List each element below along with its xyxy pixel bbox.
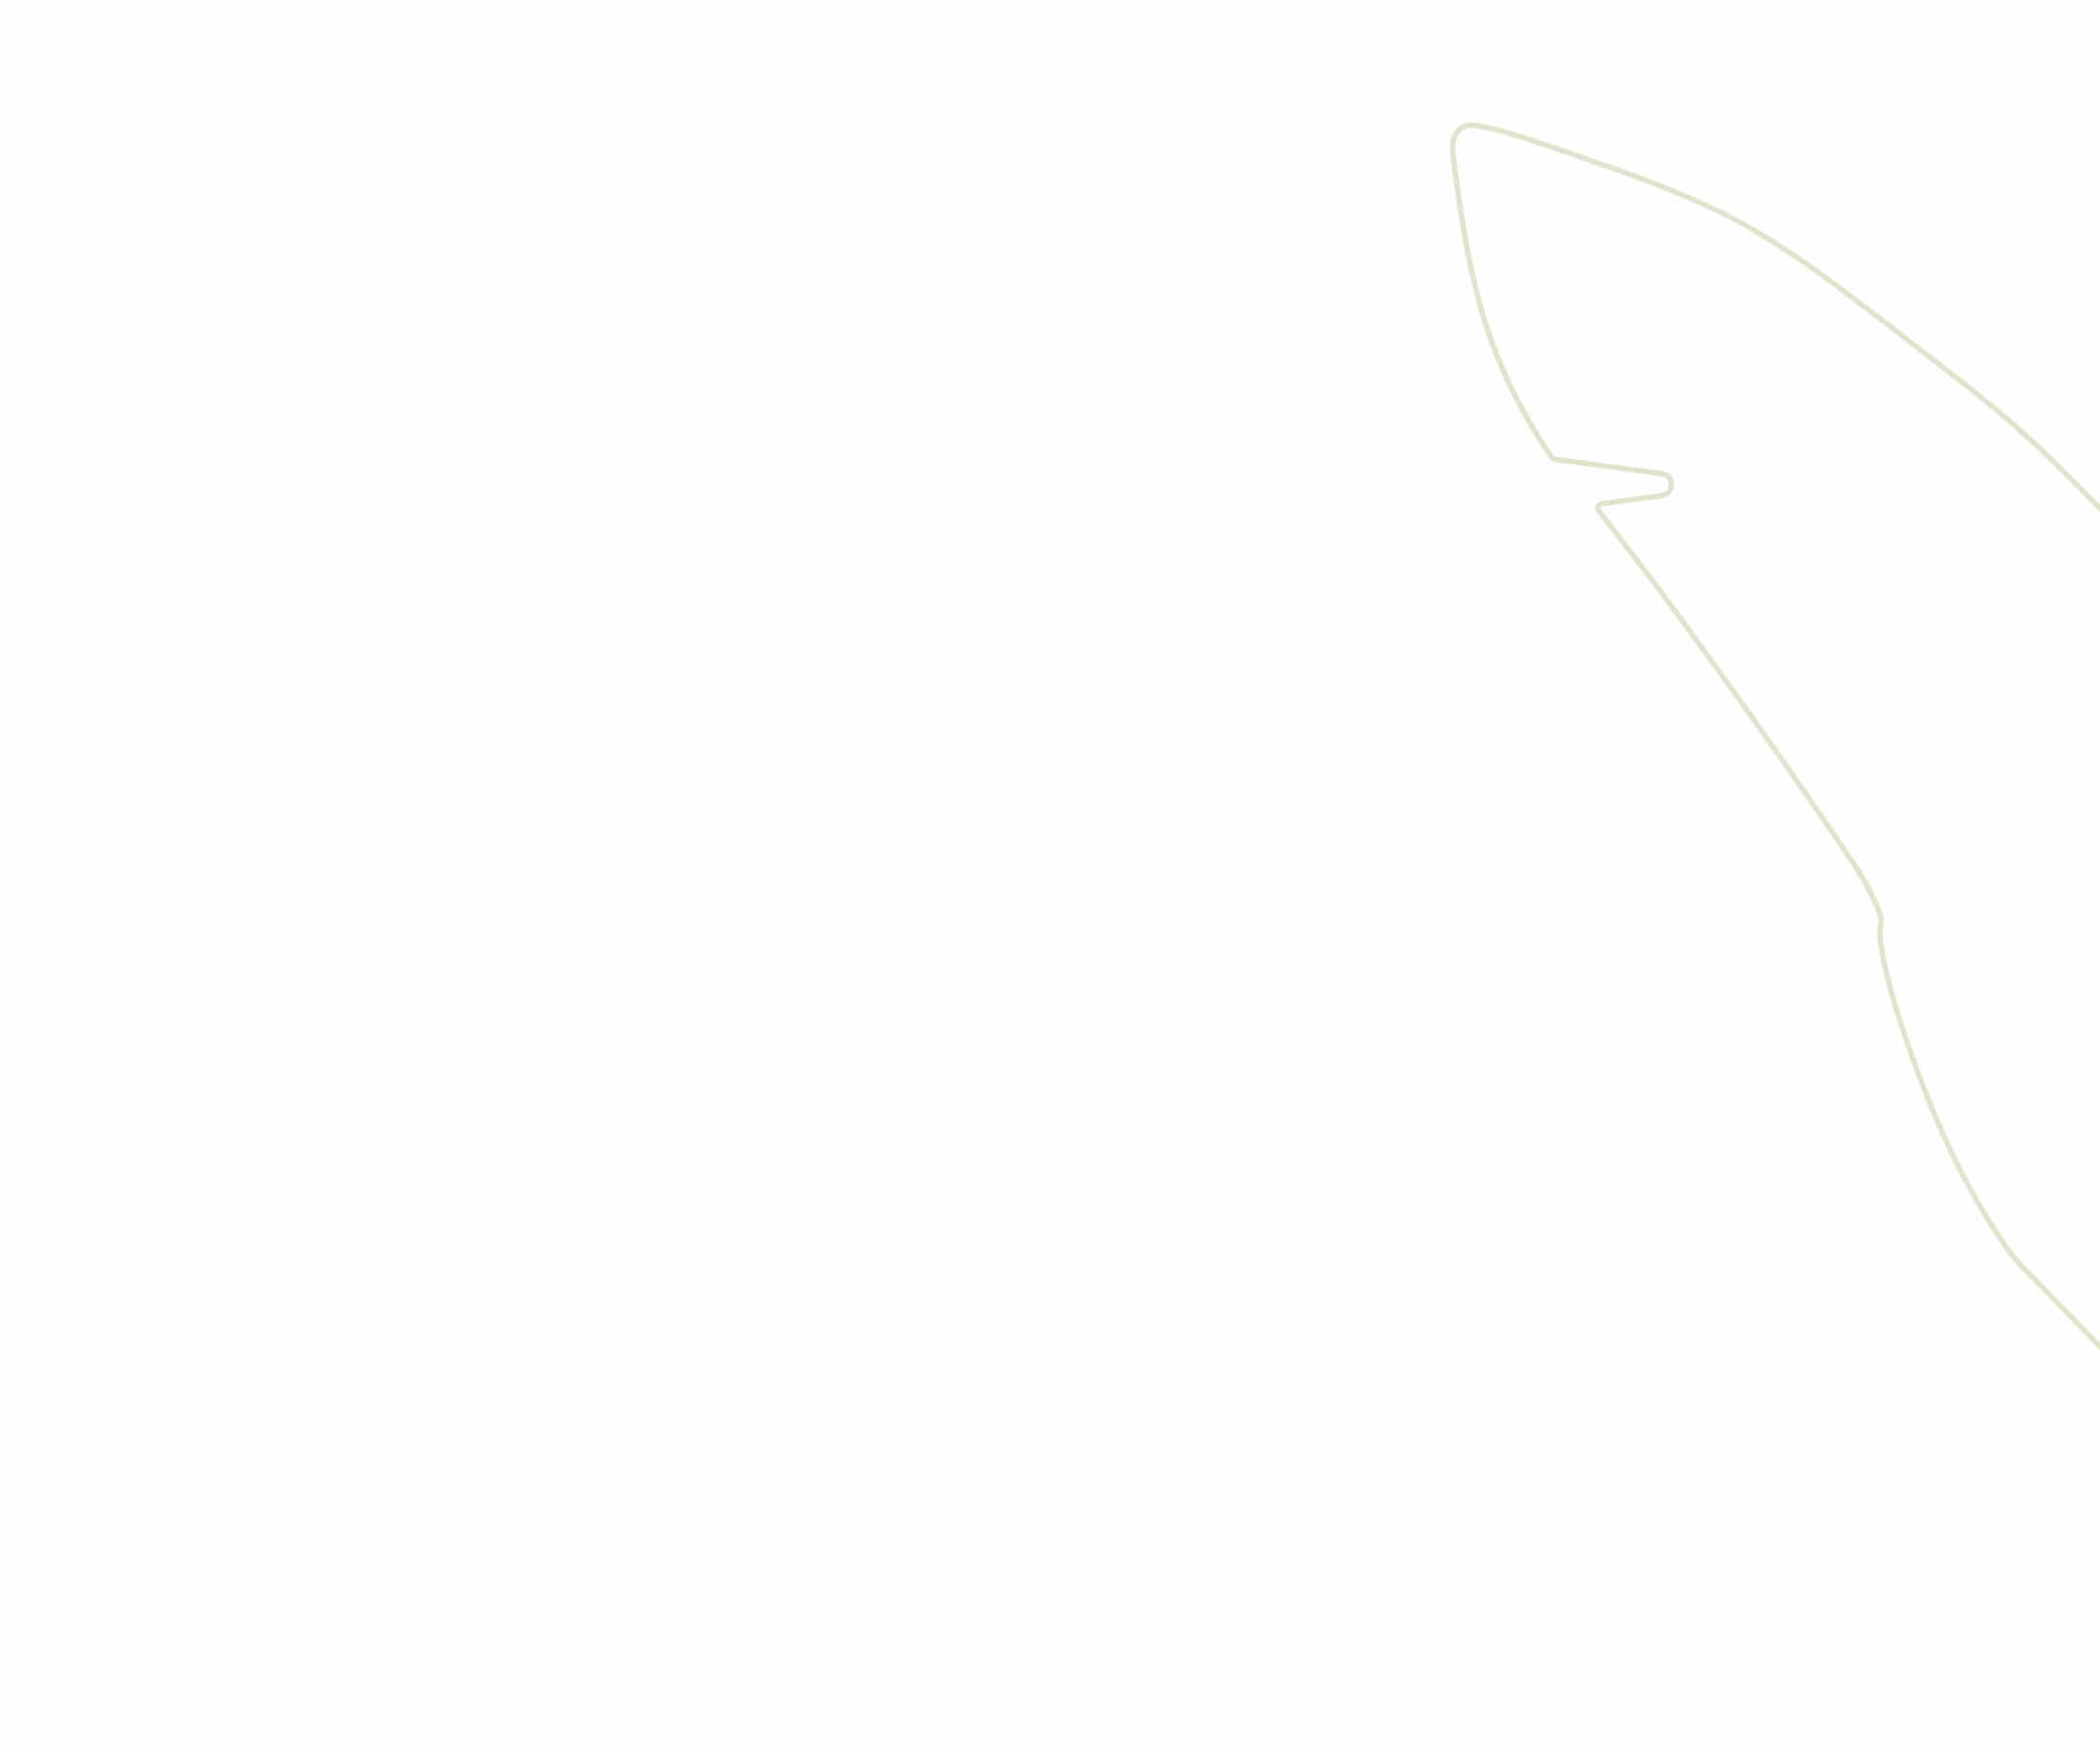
outline shape: pale olive contour bleeding off the right edge [1452, 125, 2100, 1351]
